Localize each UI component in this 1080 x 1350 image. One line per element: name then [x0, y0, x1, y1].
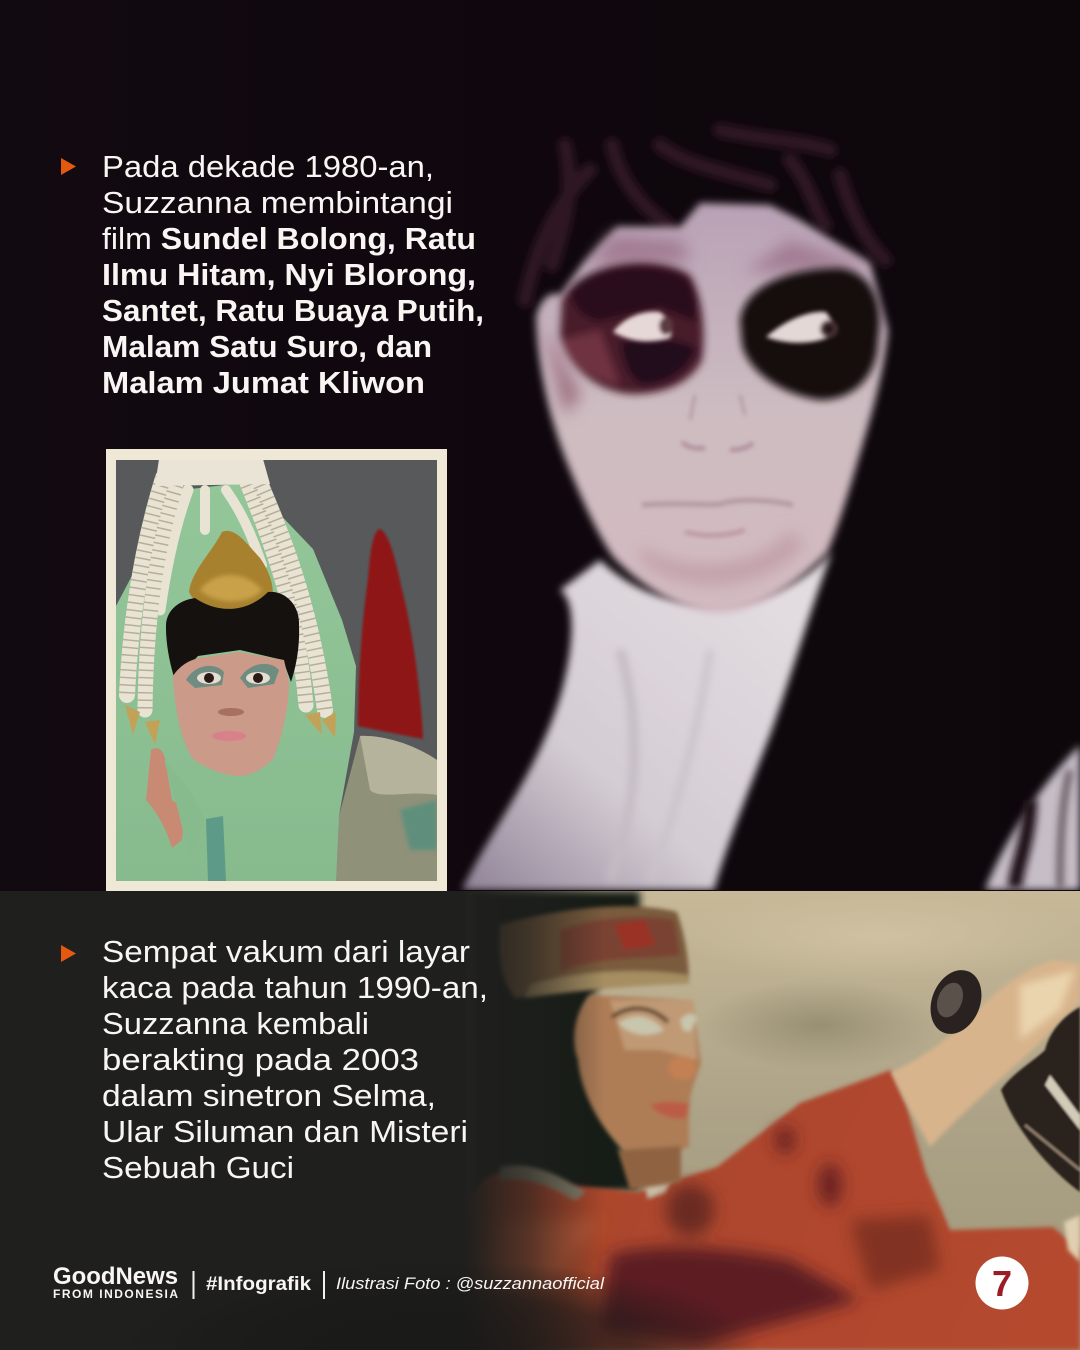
jasmine strands [127, 478, 325, 710]
garment folds and hair strands [610, 650, 1070, 888]
inset photo: Suzzanna in green veil and gold crown [106, 449, 447, 891]
nose and lips [642, 395, 793, 536]
background photo: woman in red robe [0, 891, 1080, 1350]
text block 1: 1980s films [102, 149, 484, 400]
photo credit: Ilustrasi Foto : @suzzannaofficial [336, 1274, 605, 1293]
robe [450, 1070, 1080, 1350]
gold tips [125, 705, 336, 745]
background photo: ghost face close-up [458, 122, 1080, 890]
raised hand [146, 748, 185, 848]
text block 1: 1980s films: Malam Satu Suro, dan [102, 329, 432, 364]
bullet arrow 2 [61, 945, 76, 962]
footer logo: GoodNews From Indonesia: GoodNews [53, 1263, 178, 1290]
text block 2: return in 2003: Sebuah Guci [102, 1150, 294, 1185]
text block 2: return in 2003: berakting pada 2003 [102, 1042, 419, 1077]
text block 1: 1980s films: film Sundel Bolong, Ratu [102, 221, 476, 256]
dark bracelet band [1001, 1007, 1080, 1192]
text block 1: 1980s films: Santet, Ratu Buaya Putih, [102, 293, 484, 328]
right eye shadow [740, 268, 880, 400]
arm and hand [891, 960, 1080, 1147]
ring [930, 970, 982, 1034]
brocade sleeve [330, 736, 437, 881]
red cloth [358, 529, 423, 739]
text block 2: return in 2003 [102, 934, 488, 1185]
page number badge [976, 1256, 1028, 1310]
bullet arrow 1 [61, 158, 76, 175]
hair [470, 891, 640, 1200]
text block 2: return in 2003: dalam sinetron Selma, [102, 1078, 436, 1113]
crown [189, 531, 273, 616]
text block 1: 1980s films: Pada dekade 1980-an, [102, 149, 434, 184]
face [173, 652, 289, 776]
left dark fade [0, 891, 598, 1350]
pale face [536, 203, 888, 613]
cream frame [106, 449, 447, 891]
text block 2: return in 2003: kaca pada tahun 1990-an, [102, 970, 488, 1005]
page number badge: 7 [992, 1263, 1012, 1304]
black hair [166, 592, 299, 682]
eye whites [613, 312, 838, 343]
reddish hair highlights above forehead [525, 130, 885, 300]
left eye shadow [560, 263, 704, 394]
headband [499, 906, 689, 998]
text block 1: 1980s films: Ilmu Hitam, Nyi Blorong, [102, 257, 476, 292]
text block 1: 1980s films: Suzzanna membintangi [102, 185, 453, 220]
text block 1: 1980s films: Malam Jumat Kliwon [102, 365, 425, 400]
face shadow and blush [545, 235, 870, 585]
robe shadows and embroidery [470, 1126, 940, 1345]
white garment [462, 552, 1080, 890]
text block 2: return in 2003: Ular Siluman dan Misteri [102, 1114, 468, 1149]
hashtag label: #Infografik [206, 1274, 311, 1295]
face [574, 995, 701, 1190]
footer logo: GoodNews From Indonesia: FROM INDONESIA [53, 1287, 178, 1301]
green veil [116, 482, 356, 881]
text block 2: return in 2003: Suzzanna kembali [102, 1006, 369, 1041]
text block 2: return in 2003: Sempat vakum dari layar [102, 934, 470, 969]
necklace [206, 816, 226, 881]
